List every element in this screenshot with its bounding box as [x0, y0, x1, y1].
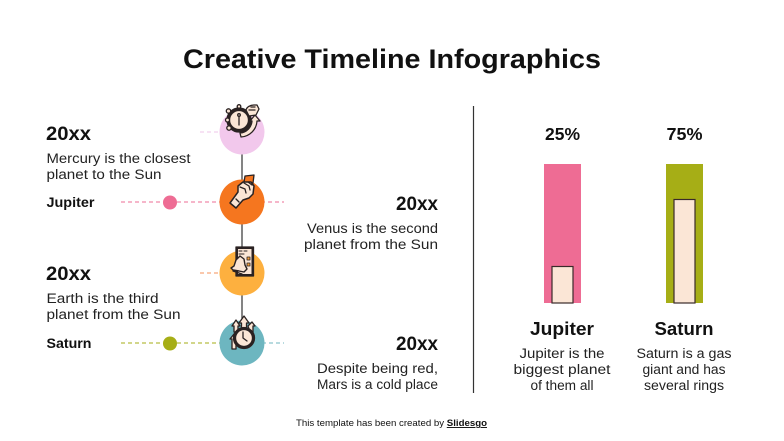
label: Saturn: [46, 336, 177, 351]
icon: stopwatch with arrow: [226, 105, 260, 137]
text block: Mercury: [46, 124, 191, 182]
label: Jupiter: [46, 195, 177, 210]
icon: fist holding paper: [230, 175, 254, 208]
chart: Jupiter bar: 25%: [545, 124, 580, 144]
footer credit: This template has been created by Slidesgo: [296, 418, 487, 429]
chart: Saturn bar: 75%: [666, 124, 703, 144]
text block: Venus: Venus is the second: [307, 221, 438, 236]
icon: bell and checklist: [231, 247, 254, 276]
text block: Venus: [304, 194, 438, 252]
text block: Mercury: 20xx: [46, 124, 91, 145]
divider: [472, 106, 474, 393]
icon: clock with rising arrows: [230, 316, 255, 349]
chart: Jupiter bar: [544, 124, 581, 303]
title: Creative Timeline Infographics: [183, 44, 601, 74]
text block: Earth: 20xx: [46, 264, 91, 285]
text block: Saturn description: several rings: [644, 378, 724, 393]
text block: Mars: [317, 334, 438, 392]
milestone: Mars: [220, 316, 264, 366]
text block: Mercury: planet to the Sun: [46, 167, 162, 182]
text block: Jupiter description: of them all: [530, 378, 594, 393]
text block: Mercury: Mercury is the closest: [46, 151, 191, 166]
text block: Saturn description: [636, 319, 732, 393]
chart: Saturn bar: [666, 124, 703, 303]
text block: Saturn description: giant and has: [642, 362, 726, 377]
text block: Saturn description: Saturn is a gas: [636, 346, 732, 361]
timeline: [121, 105, 284, 365]
text block: Jupiter description: Jupiter is the: [520, 346, 604, 361]
milestone: Venus: [220, 175, 264, 224]
text block: Venus: planet from the Sun: [304, 237, 438, 252]
text block: Venus: 20xx: [396, 194, 438, 215]
text block: Jupiter description: biggest planet: [514, 362, 611, 377]
text block: Mars: Despite being red,: [317, 361, 438, 376]
text block: Jupiter description: Jupiter: [530, 319, 594, 339]
label: Jupiter: Jupiter: [46, 195, 95, 210]
label: Saturn: Saturn: [46, 336, 92, 351]
text block: Earth: [46, 264, 180, 322]
text block: Earth: Earth is the third: [46, 291, 158, 306]
text block: Saturn description: Saturn: [654, 319, 714, 339]
text block: Earth: planet from the Sun: [46, 307, 180, 322]
milestone: Mercury: [220, 105, 264, 154]
text block: Mars: 20xx: [396, 334, 438, 355]
milestone: Earth: [220, 247, 264, 296]
text block: Mars: Mars is a cold place: [317, 377, 438, 392]
text block: Jupiter description: [514, 319, 611, 393]
